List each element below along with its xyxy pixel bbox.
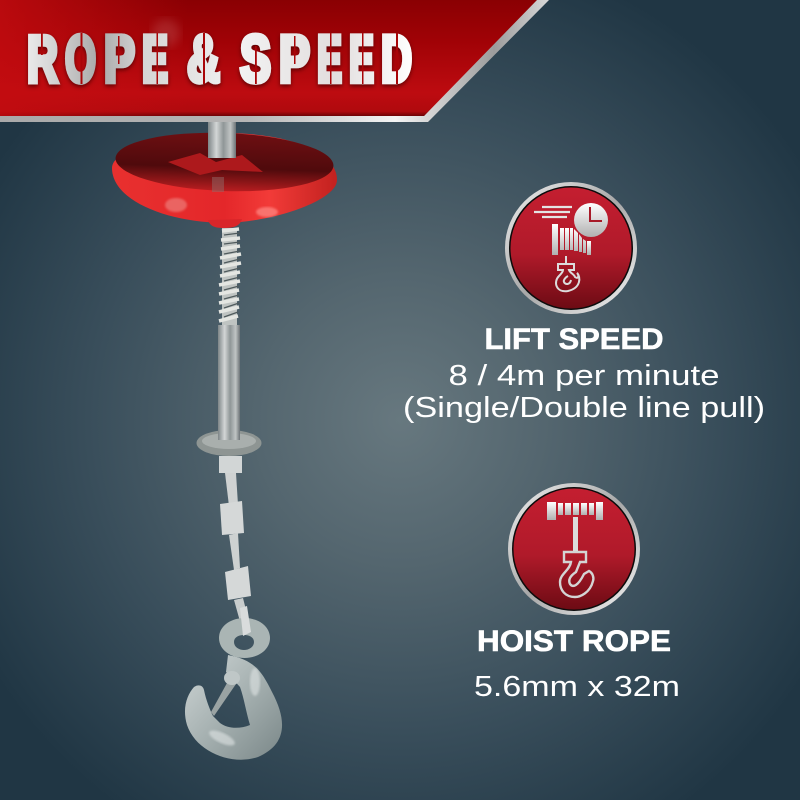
flange <box>196 430 262 456</box>
speed lines <box>534 207 572 217</box>
title: E <box>142 22 168 96</box>
lens flare <box>152 19 180 47</box>
text: hoist rope: HOIST ROPE <box>477 625 671 658</box>
title: P <box>104 22 135 96</box>
hook <box>560 552 593 597</box>
text: lift speed: 8 / 4m per minute <box>448 360 720 392</box>
icon: hoist rope badge <box>508 483 640 615</box>
drum <box>552 224 591 255</box>
drum <box>547 502 603 520</box>
red disc <box>112 129 337 228</box>
hook <box>185 606 282 760</box>
title: & <box>187 22 220 96</box>
text: lift speed <box>403 323 765 424</box>
title: R <box>27 22 58 96</box>
text: lift speed: (Single/Double line pull) <box>403 392 765 424</box>
title: D <box>381 22 412 96</box>
title: O <box>65 22 96 96</box>
red panel <box>0 0 537 116</box>
spring screw <box>219 228 241 326</box>
upper rod <box>208 118 236 158</box>
lower rod <box>218 325 240 440</box>
silver edge <box>0 0 549 122</box>
icon: lift speed badge <box>505 182 637 314</box>
title: E <box>317 22 342 96</box>
title: S <box>240 22 271 96</box>
text: hoist rope <box>474 625 680 703</box>
clock <box>574 203 608 237</box>
rope <box>573 517 578 552</box>
text: hoist rope: 5.6mm x 32m <box>474 671 680 703</box>
cable and ferrules <box>219 456 251 625</box>
title: P <box>279 22 310 96</box>
title: E <box>349 22 374 96</box>
hook <box>556 256 579 291</box>
product photo: rope and hook <box>112 118 337 760</box>
text: lift speed: LIFT SPEED <box>484 323 664 356</box>
header banner <box>0 0 549 122</box>
title <box>27 22 412 96</box>
